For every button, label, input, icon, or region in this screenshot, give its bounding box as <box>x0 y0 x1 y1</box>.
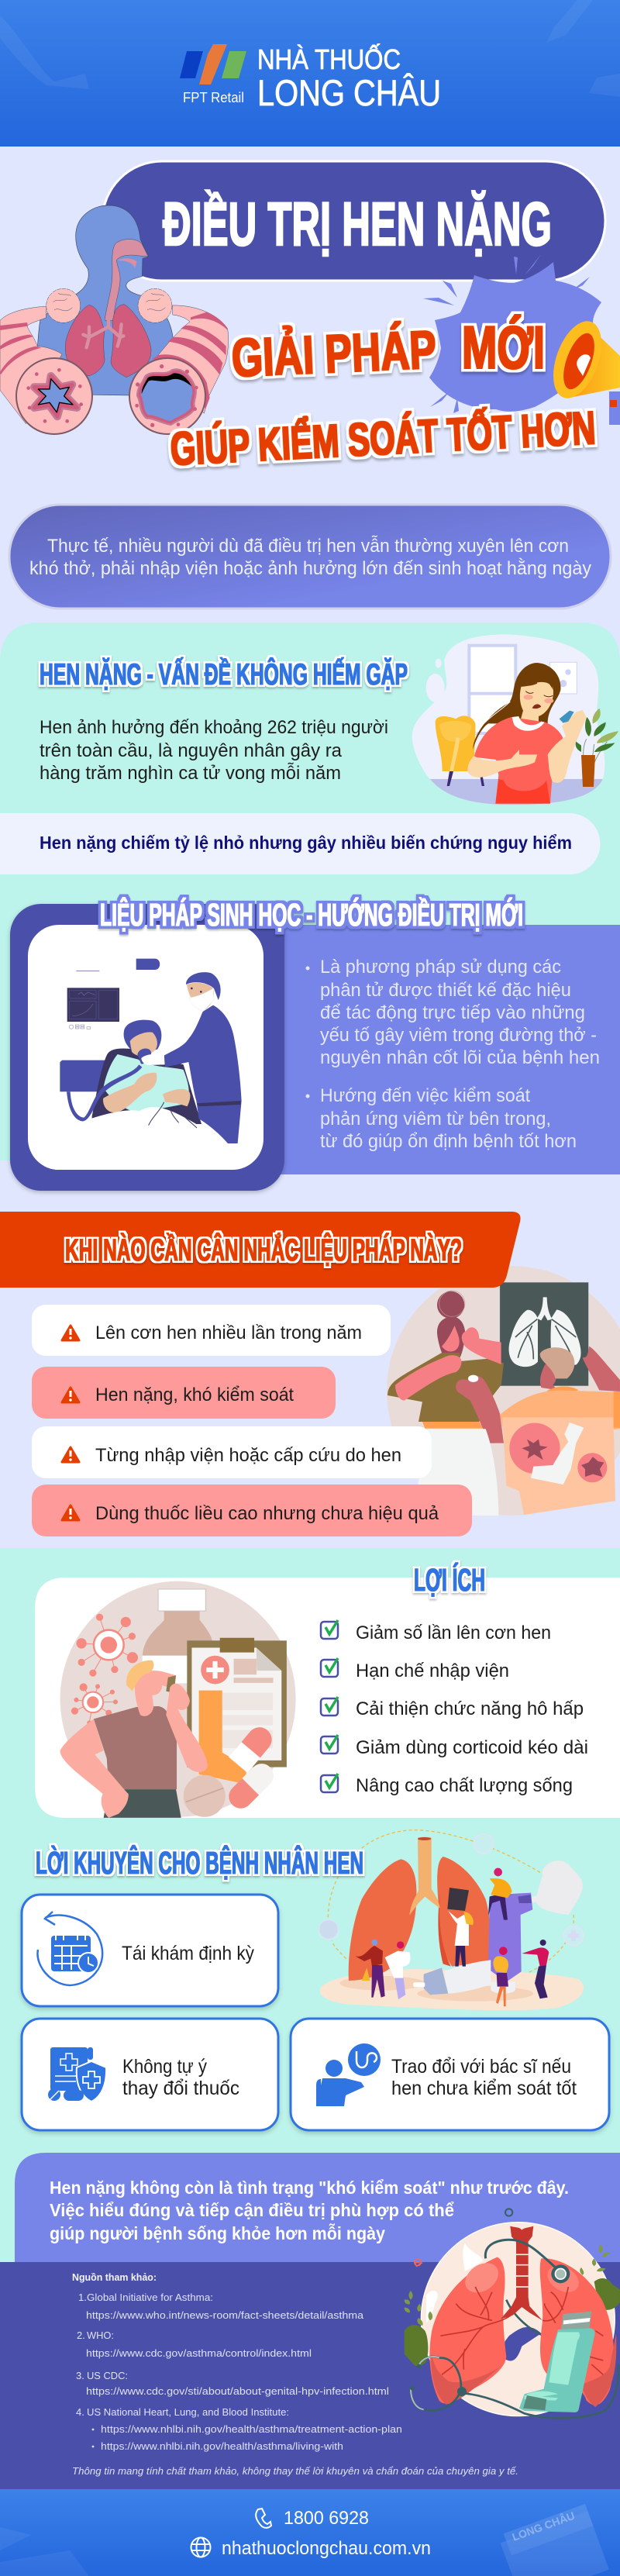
airway cross-section: open <box>129 358 205 434</box>
illustration: doctor helping patient <box>44 959 242 1171</box>
contact: website: nhathuoclongchau.com.vn <box>222 2538 431 2559</box>
card: talk to doctor <box>291 2019 609 2130</box>
logo: Nhà Thuốc Long Châu: LONG CHÂU <box>257 72 441 113</box>
card: follow-up visit <box>22 1895 278 2006</box>
panel: conclusion: Hen nặng không còn là tình trạng "khó kiểm soát" như trước đây. <box>50 2178 569 2198</box>
list item 2 <box>32 1367 336 1419</box>
panel: references: https://www.cdc.gov/asthma/control/index.html <box>86 2347 312 2359</box>
benefit item 2: Hạn chế nhập viện <box>356 1660 509 1681</box>
intro pill <box>9 505 611 609</box>
panel: benefits <box>35 1562 620 1818</box>
panel: references: Nguồn tham khảo: <box>72 2271 157 2283</box>
card: do not change medication <box>22 2019 278 2130</box>
panel: biologic therapy text <box>271 925 620 1174</box>
section background: mint <box>0 622 620 1160</box>
card: do not change medication: thay đổi thuốc <box>122 2078 239 2099</box>
panel: biologic therapy text: từ đó giúp ổn định bệnh tốt hơn <box>320 1131 577 1152</box>
card: follow-up visit: Tái khám định kỳ <box>122 1943 254 1964</box>
panel: references: Global Initiative for Asthma: <box>87 2292 213 2303</box>
logo: FPT Retail <box>180 44 246 105</box>
section heading: benefits: LỢI ÍCH <box>414 1562 485 1598</box>
list item 4: Dùng thuốc liều cao nhưng chưa hiệu quả <box>95 1503 439 1524</box>
icon: prescription and shield <box>48 2047 106 2102</box>
panel: biologic therapy text: để tác động trực tiếp vào những <box>320 1002 585 1023</box>
contact: phone: 1800 6928 <box>284 2508 369 2529</box>
text block: asthma statistics: trên toàn cầu, là nguyên nhân gây ra <box>40 740 343 761</box>
airway cross-section: narrowed <box>16 358 92 434</box>
callout strip <box>0 813 600 874</box>
section heading: advice: LỜI KHUYÊN CHO BỆNH NHÂN HEN <box>36 1845 363 1881</box>
panel: biologic therapy text: phân tử được thiết kế đặc hiệu <box>320 980 571 1001</box>
benefit item 3: Cải thiện chức năng hô hấp <box>356 1698 584 1719</box>
panel: references: 4. <box>76 2406 84 2418</box>
panel: references: US CDC: <box>87 2370 128 2381</box>
card: do not change medication: Không tự ý <box>122 2056 207 2078</box>
footer band <box>0 2489 620 2576</box>
panel: conclusion <box>15 2153 620 2262</box>
callout strip: Hen nặng chiếm tỷ lệ nhỏ nhưng gây nhiều biến chứng nguy hiểm <box>40 833 572 853</box>
section heading: hen nặng: HEN NẶNG - VẤN ĐỀ KHÔNG HIẾM GẶP <box>40 657 408 691</box>
banner: when to consider <box>0 1212 521 1288</box>
panel: conclusion: giúp người bệnh sống khỏe hơn mỗi ngày <box>50 2223 385 2243</box>
headline: giải pháp mới: MỚI <box>462 313 545 381</box>
list item 3 <box>32 1426 432 1478</box>
panel: biologic therapy text: Là phương pháp sử dụng các <box>320 957 561 978</box>
icon: warning <box>62 1388 79 1402</box>
intro pill: khó thở, phải nhập viện hoặc ảnh hưởng lớn đến sinh hoạt hằng ngày <box>29 558 591 579</box>
benefit item 4: Giảm dùng corticoid kéo dài <box>356 1737 588 1758</box>
burst badge <box>423 254 601 413</box>
logo: Nhà Thuốc Long Châu: NHÀ THUỐC <box>257 43 401 75</box>
benefit item 5: Nâng cao chất lượng sống <box>356 1775 573 1796</box>
intro pill: Thực tế, nhiều người dù đã điều trị hen vẫn thường xuyên lên cơn <box>47 536 569 557</box>
panel: conclusion: Việc hiểu đúng và tiếp cận điều trị phù hợp có thể <box>50 2200 454 2220</box>
panel: biologic therapy text: yếu tố gây viêm trong đường thở - <box>320 1025 597 1046</box>
benefit item 1: Giảm số lần lên cơn hen <box>356 1623 551 1643</box>
list item 2: Hen nặng, khó kiểm soát <box>95 1385 294 1405</box>
header band <box>0 0 620 147</box>
illustration: respiratory system and airways <box>0 205 229 434</box>
panel: references: WHO: <box>87 2329 114 2341</box>
list item 3: Từng nhập viện hoặc cấp cứu do hen <box>95 1445 401 1466</box>
list item 1 <box>32 1305 391 1356</box>
panel: references: 3. <box>76 2370 84 2381</box>
illustration: x-ray consultation <box>387 1266 620 1516</box>
card: talk to doctor: hen chưa kiểm soát tốt <box>391 2078 577 2099</box>
panel: doctor image card <box>10 904 284 1191</box>
section background: benefits and advice <box>0 1548 620 2262</box>
panel: biologic therapy text: phản ứng viêm từ bên trong, <box>320 1109 551 1129</box>
icon: calendar with clock <box>37 1912 102 1985</box>
panel: references: 2. <box>77 2329 85 2341</box>
icon: warning <box>62 1505 79 1520</box>
list item 1: Lên cơn hen nhiều lần trong năm <box>95 1322 362 1343</box>
list item 4 <box>32 1485 472 1536</box>
card: talk to doctor: Trao đổi với bác sĩ nếu <box>391 2056 571 2078</box>
illustration: lungs with tiny people <box>319 1830 584 2010</box>
panel: biologic therapy text: Hướng đến việc kiểm soát <box>320 1085 530 1106</box>
title pill <box>102 161 605 281</box>
illustration: man with inhaler and medicine <box>60 1581 296 1818</box>
icon: warning <box>62 1326 79 1340</box>
text block: asthma statistics: hàng trăm nghìn ca tử vong mỗi năm <box>40 763 341 784</box>
icon: warning <box>62 1447 79 1462</box>
panel: references: US National Heart, Lung, and Blood Institute: <box>87 2406 289 2418</box>
icon: person and stethoscope <box>316 2043 381 2106</box>
panel: biologic therapy text: nguyên nhân cốt lõi của bệnh hen <box>320 1047 600 1068</box>
panel: references: Thông tin mang tính chất tham khảo, không thay thế lời khuyên và chẩn đoán của chuyên gia y tế. <box>72 2465 518 2477</box>
panel: references: https://www.nhlbi.nih.gov/health/asthma/treatment-action-plan <box>101 2423 402 2435</box>
logo: FPT Retail: FPT Retail <box>183 90 244 105</box>
footer band: LONG CHÂU <box>510 2509 577 2543</box>
illustration: lungs, globe and inhaler <box>405 2209 620 2418</box>
panel: references: https://www.cdc.gov/sti/about/about-genital-hpv-infection.html <box>86 2385 389 2397</box>
text block: asthma statistics: Hen ảnh hưởng đến khoảng 262 triệu người <box>40 717 388 738</box>
illustration: woman using inhaler <box>411 634 618 808</box>
headline: giải pháp mới: GIẢI PHÁP <box>230 319 437 388</box>
text block: asthma statistics <box>40 717 388 784</box>
panel: references: 1. <box>78 2292 87 2303</box>
logo: Nhà Thuốc Long Châu <box>257 43 441 113</box>
icon: megaphone <box>544 315 620 425</box>
panel: references <box>0 2262 620 2489</box>
panel: references: https://www.who.int/news-room/fact-sheets/detail/asthma <box>86 2309 364 2321</box>
panel: references: https://www.nhlbi.nih.gov/health/asthma/living-with <box>101 2440 343 2452</box>
